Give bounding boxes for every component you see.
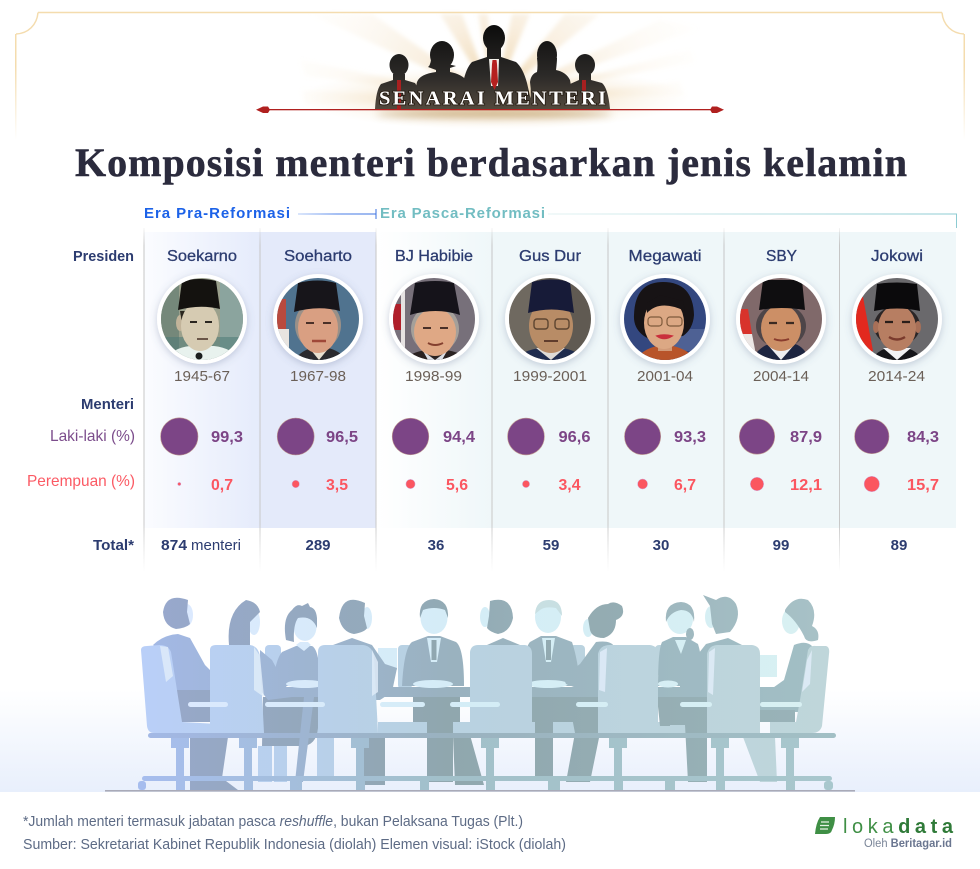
seated front-facing ministers [258,599,702,785]
back man 1 [181,604,193,626]
values: Laki-laki: 96,5 [326,429,358,446]
values: Laki-laki: 99,3 [211,429,243,446]
footer notes: Sumber: Sekretariat Kabinet Republik Indonesia (diolah) Elemen visual: iStock (diolah) [23,837,566,853]
row: totals: 874 [161,537,188,554]
portrait: Jokowi [852,274,942,364]
row labels: gender: Perempuan (%) [27,473,135,490]
portrait: SBY [736,274,826,364]
row labels: gender [27,397,135,490]
row label: Presiden: Presiden [73,249,134,265]
silhouette: right woman [529,41,572,109]
values: Perempuan: 3,4 [558,477,581,494]
floor line [105,790,855,792]
icon: leaf [815,817,835,834]
values: Perempuan: 0,7 [211,477,233,494]
portrait years: 1945-67 [174,368,230,385]
era timeline [144,205,956,228]
office chairs [141,645,829,733]
row: totals: 30 [653,537,669,554]
portrait: BJ Habibie [389,274,479,364]
back woman 3 [782,608,800,634]
illustration: cabinet meeting [138,595,836,790]
portrait: Gus Dur [505,274,595,364]
man 1 [420,602,448,634]
row: totals: Total* [93,537,134,554]
row: totals: 289 [305,537,331,554]
values: Perempuan: 12,1 [790,477,822,494]
logo: lokadata: lokadata [843,816,954,838]
portrait: Soeharto [273,274,363,364]
president names: Jokowi [871,248,923,265]
president names: Soekarno [167,248,237,265]
chair pedestals and bases [138,738,833,790]
row: totals: 89 [891,537,907,554]
portrait years [174,368,925,385]
values: Laki-laki: 84,3 [907,429,939,446]
row: totals: 59 [543,537,559,554]
back man 2 [362,607,372,629]
woman 2 [667,604,693,634]
portrait: Megawati [620,274,710,364]
portrait years: 1967-98 [290,368,346,385]
values: Perempuan: 3,5 [326,477,348,494]
table backgrounds [144,232,956,528]
president names: Megawati [628,248,702,265]
bubbles: Laki-laki [161,418,889,455]
shirt and tie [489,59,499,86]
footer notes [23,814,566,853]
row labels: gender: Menteri [81,397,134,413]
portrait: Soekarno [157,274,247,364]
woman 1 [294,613,316,641]
portrait years: 2004-14 [753,368,809,385]
footer notes: *Jumlah menteri termasuk jabatan pasca reshuffle, bukan Pelaksana Tugas (Plt.) [23,814,523,830]
era label: pasca-reformasi: Era Pasca-Reformasi [380,205,545,222]
ornament line [256,106,724,113]
president names: SBY [766,248,797,265]
back woman 2 [583,619,593,637]
banner text: SENARAI MENTERI [379,88,606,110]
row labels: gender: Laki-laki (%) [50,428,135,445]
portrait years: 1998-99 [405,368,462,385]
silhouette: right man [565,54,610,109]
table papers [378,648,397,670]
president names: BJ Habibie [395,248,473,265]
conference table [270,648,795,782]
chair armrests [188,702,802,707]
values: Laki-laki: 93,3 [674,429,706,446]
back woman [248,609,260,635]
title: Komposisi menteri berdasarkan jenis kelamin [75,140,907,185]
back man 3 [480,607,490,627]
back-facing ministers [153,595,818,790]
bubbles: Perempuan [178,476,879,492]
silhouette: left woman [413,41,468,109]
president names: Soeharto [284,248,352,265]
logo: lokadata: Oleh Beritagar.id [864,838,952,850]
portrait years: 2014-24 [868,368,925,385]
back man 4 [705,606,717,628]
president names [167,248,923,265]
row: totals: menteri [191,537,241,554]
values: Perempuan [211,477,939,494]
silhouette: left man [375,54,421,109]
era line: pasca-reformasi [548,214,956,228]
row: totals [93,537,907,554]
seat band [148,733,836,738]
era line: pra-reformasi [298,209,376,219]
chairs behind front-facing ministers [263,645,708,733]
values: Laki-laki: 96,6 [558,429,591,446]
values: Laki-laki: 94,4 [443,429,475,446]
floor gradient [0,690,980,792]
values: Laki-laki: 87,9 [790,429,822,446]
values: Perempuan: 15,7 [907,477,939,494]
values: Perempuan: 5,6 [446,477,468,494]
chair highlights [160,646,812,697]
portrait years: 1999-2001 [513,368,587,385]
row: totals: 36 [428,537,444,554]
values: Laki-laki [211,429,939,446]
header emblem: Senarai Menteri [256,14,724,130]
row: totals: 99 [773,537,789,554]
bottom glow [299,66,689,130]
logo: lokadata [815,816,954,850]
president names: Gus Dur [519,248,582,265]
silhouette: central man [453,25,533,109]
era label: pra-reformasi: Era Pra-Reformasi [144,205,290,222]
header frame [15,12,965,140]
sunburst rays [300,14,700,105]
values: Perempuan: 6,7 [674,477,696,494]
portrait years: 2001-04 [637,368,693,385]
man 2 [535,601,561,633]
